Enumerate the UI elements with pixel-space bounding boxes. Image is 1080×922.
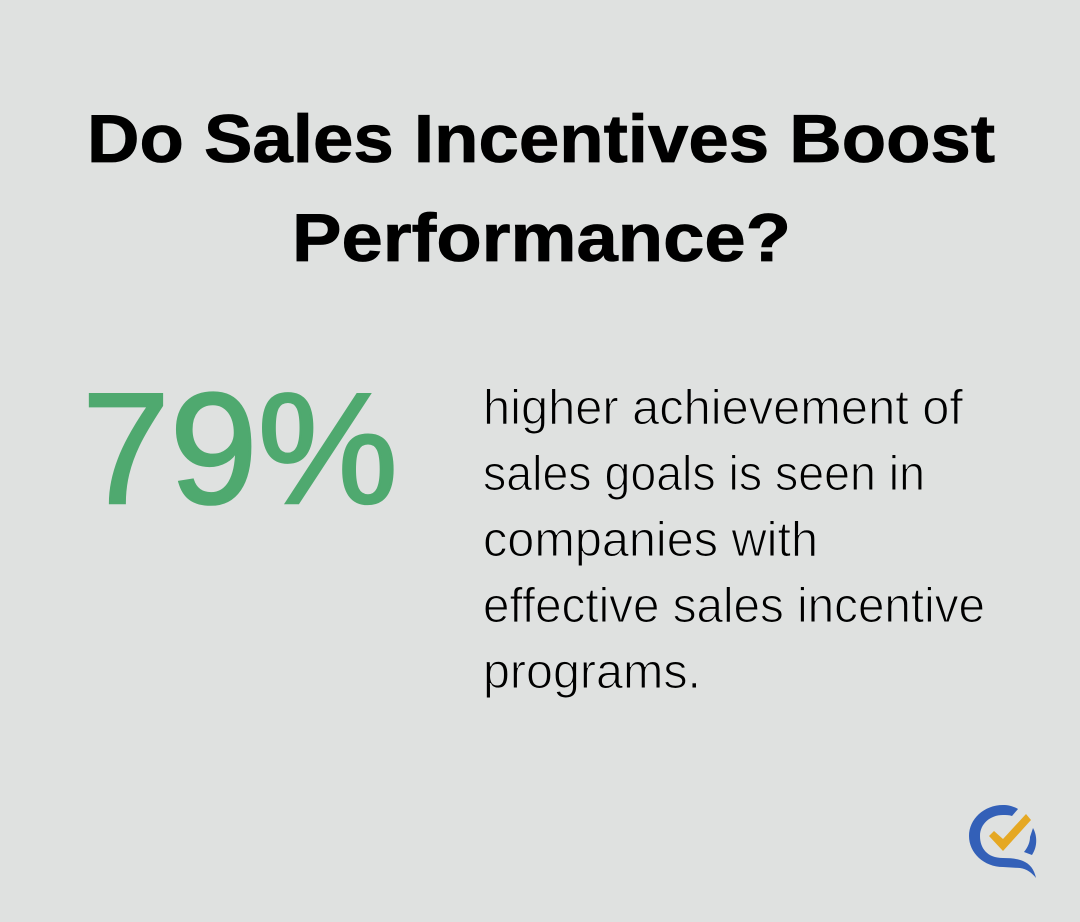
title: Do Sales Incentives Boost: [87, 101, 995, 177]
big statistic: 79%: 79%: [82, 361, 398, 537]
description text: [483, 381, 985, 699]
title: Performance?: [292, 200, 791, 276]
icon: logo speech bubble with check mark: [969, 805, 1036, 878]
description text: effective sales incentive: [483, 579, 985, 633]
description text: higher achievement of: [483, 381, 963, 435]
description text: sales goals is seen in: [483, 447, 925, 501]
description text: companies with: [483, 513, 818, 567]
description text: programs.: [483, 645, 701, 699]
title: [87, 101, 995, 276]
